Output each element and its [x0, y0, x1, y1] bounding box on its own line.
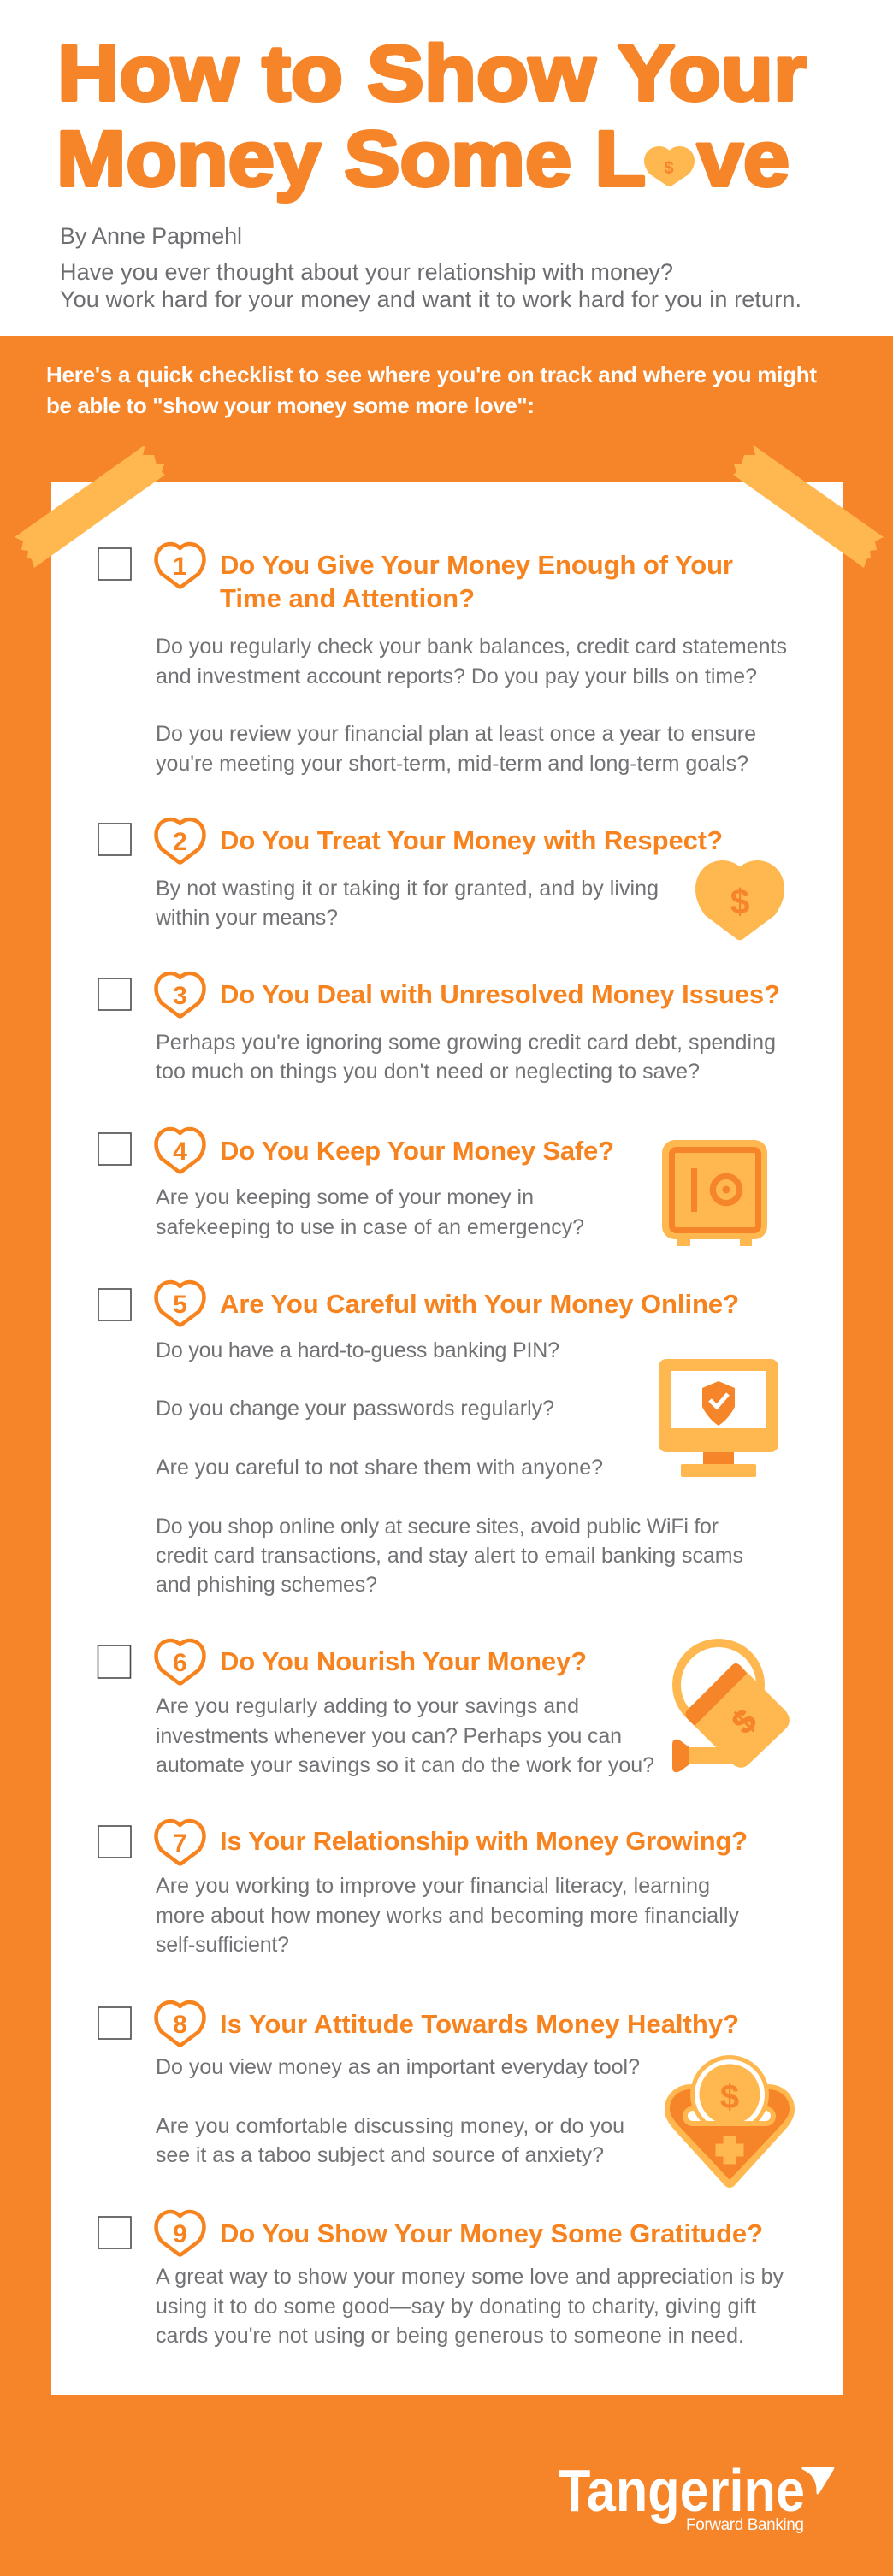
- body 6: Are you regularly adding to your savings and: [156, 1694, 579, 1718]
- body 2: within your means?: [155, 906, 338, 930]
- body 5: [156, 1338, 743, 1597]
- heading 7: Is Your Relationship with Money Growing?: [220, 1826, 748, 1856]
- body 1: and investment account reports? Do you pay your bills on time?: [156, 665, 757, 688]
- heart number 8: [156, 2002, 204, 2045]
- title: ve: [697, 115, 790, 203]
- heading 6: Do You Nourish Your Money?: [220, 1646, 587, 1676]
- title: [56, 30, 807, 203]
- body 1: you're meeting your short-term, mid-term and long-term goals?: [156, 752, 748, 776]
- body 1: [156, 635, 787, 776]
- body 8: Do you view money as an important everyday tool?: [156, 2055, 640, 2079]
- body 2: By not wasting it or taking it for granted, and by living: [156, 877, 659, 901]
- heart number 5: 5: [173, 1291, 187, 1319]
- body 5: Do you have a hard-to-guess banking PIN?: [156, 1338, 559, 1362]
- body 8: Are you comfortable discussing money, or do you: [156, 2114, 624, 2138]
- body 8: [156, 2055, 640, 2167]
- heart number 7: [156, 1821, 204, 1864]
- icon: title heart replacing the letter o: [644, 146, 695, 186]
- heading 3: Do You Deal with Unresolved Money Issues?: [220, 979, 780, 1009]
- heading 5: Are You Careful with Your Money Online?: [220, 1289, 739, 1319]
- byline: By Anne Papmehl: [60, 223, 242, 249]
- item 8: [98, 2002, 795, 2188]
- body 7: self-sufficient?: [156, 1933, 289, 1957]
- item 3: [98, 973, 780, 1084]
- icon: heart pouch with coin and plus: [665, 2055, 795, 2188]
- icon: heart with dollar sign: $: [730, 882, 750, 921]
- heading 1: Time and Attention?: [220, 583, 475, 613]
- checkbox 2: [98, 824, 131, 855]
- item 7: [98, 1821, 748, 1957]
- body 9: [156, 2265, 784, 2348]
- icon: heart with dollar sign: [695, 860, 784, 940]
- body 9: A great way to show your money some love and appreciation is by: [156, 2265, 784, 2289]
- body 3: Perhaps you're ignoring some growing credit card debt, spending: [156, 1031, 776, 1055]
- intro text: You work hard for your money and want it to work hard for you in return.: [60, 287, 801, 312]
- body 7: more about how money works and becoming more financially: [156, 1904, 739, 1928]
- body 9: cards you're not using or being generous to someone in need.: [156, 2324, 744, 2348]
- heading 2: Do You Treat Your Money with Respect?: [220, 825, 723, 855]
- checklist intro text: [46, 362, 817, 418]
- body 2: [155, 877, 659, 930]
- body 3: [156, 1031, 776, 1084]
- body 6: investments whenever you can? Perhaps you can: [156, 1724, 622, 1748]
- panel: checklist paper: [15, 445, 884, 2395]
- body 7: [156, 1874, 739, 1957]
- title: Money Some L: [56, 115, 646, 203]
- checkbox 4: [98, 1133, 131, 1165]
- logo: Tangerine Forward Banking: Tangerine: [559, 2457, 805, 2524]
- heart number 3: 3: [173, 982, 187, 1010]
- body 9: using it to do some good—say by donating to charity, giving gift: [156, 2295, 756, 2319]
- intro text: Have you ever thought about your relationship with money?: [60, 259, 673, 285]
- body 4: safekeeping to use in case of an emergency?: [156, 1215, 584, 1239]
- icon: safe: [662, 1140, 767, 1246]
- icon: heart pouch with coin and plus: $: [720, 2078, 739, 2116]
- icon: title heart replacing the letter o: $: [664, 159, 674, 178]
- body 7: Are you working to improve your financial literacy, learning: [156, 1874, 710, 1898]
- icon: watering can with dollar sign: $: [725, 1703, 764, 1741]
- checkbox 1: [98, 548, 131, 580]
- heading 9: Do You Show Your Money Some Gratitude?: [220, 2219, 763, 2248]
- checkbox 6: [98, 1645, 130, 1678]
- body 6: [156, 1694, 654, 1777]
- heart number 3: [156, 973, 204, 1016]
- item 2: [98, 819, 784, 940]
- body 4: [156, 1185, 584, 1239]
- body 5: Are you careful to not share them with anyone?: [156, 1456, 603, 1480]
- body 5: and phishing schemes?: [156, 1573, 377, 1597]
- checkbox 5: [98, 1289, 131, 1320]
- item 5: [98, 1282, 778, 1597]
- body 5: Do you change your passwords regularly?: [156, 1397, 554, 1421]
- body 3: too much on things you don't need or neglecting to save?: [156, 1060, 700, 1084]
- body 6: automate your savings so it can do the work for you?: [156, 1753, 654, 1777]
- icon: watering can with dollar sign: [672, 1643, 790, 1772]
- body 1: Do you regularly check your bank balances, credit card statements: [156, 635, 787, 659]
- heart number 4: [156, 1129, 204, 1172]
- checkbox 9: [98, 2217, 131, 2248]
- heart number 8: 8: [173, 2011, 187, 2039]
- item 6: [98, 1640, 790, 1777]
- heart number 5: [156, 1282, 204, 1325]
- checkbox 8: [98, 2007, 131, 2039]
- heart number 1: [156, 544, 204, 587]
- heart number 7: 7: [173, 1829, 187, 1858]
- checklist intro text: be able to "show your money some more love":: [46, 393, 535, 418]
- icon: computer monitor with shield: [659, 1359, 778, 1477]
- heading 1: [220, 550, 733, 613]
- heading 4: Do You Keep Your Money Safe?: [220, 1136, 614, 1166]
- heart number 4: 4: [173, 1137, 187, 1166]
- heart number 9: [156, 2212, 204, 2254]
- icon: Tangerine leaf mark: [801, 2467, 834, 2494]
- item 9: [98, 2212, 784, 2348]
- body 1: Do you review your financial plan at least once a year to ensure: [156, 722, 756, 746]
- checkbox 3: [98, 978, 131, 1010]
- body 5: Do you shop online only at secure sites, avoid public WiFi for: [156, 1515, 719, 1539]
- heart number 6: [156, 1640, 204, 1683]
- body 4: Are you keeping some of your money in: [156, 1185, 534, 1209]
- item 1: [98, 544, 787, 776]
- title: How to Show Your: [57, 30, 807, 117]
- body 8: see it as a taboo subject and source of anxiety?: [156, 2143, 604, 2167]
- heading 1: Do You Give Your Money Enough of Your: [220, 550, 733, 580]
- heart number 1: 1: [173, 552, 187, 581]
- tape: top right: [733, 445, 884, 568]
- checkbox 7: [98, 1826, 131, 1858]
- heart number 9: 9: [173, 2220, 187, 2248]
- intro text: [60, 259, 801, 312]
- heart number 2: [156, 819, 204, 862]
- body 5: credit card transactions, and stay alert to email banking scams: [156, 1544, 743, 1568]
- logo: Tangerine Forward Banking: Forward Banking: [686, 2516, 804, 2534]
- item 4: [98, 1129, 767, 1246]
- heart number 2: 2: [173, 828, 187, 856]
- tape: top left: [15, 445, 165, 568]
- checklist intro text: Here's a quick checklist to see where you're on track and where you might: [46, 362, 817, 387]
- heart number 6: 6: [173, 1649, 187, 1677]
- heading 8: Is Your Attitude Towards Money Healthy?: [220, 2009, 739, 2039]
